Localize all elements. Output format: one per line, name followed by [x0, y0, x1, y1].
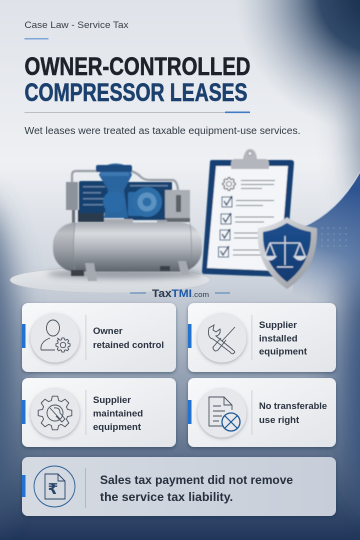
card: owner retained control [22, 303, 176, 372]
title: OWNER-CONTROLLED [24, 53, 250, 81]
card text: retained control [93, 340, 164, 351]
title rule [24, 112, 250, 113]
card text: installed [259, 334, 298, 344]
feet [71, 270, 84, 276]
blue machinery [79, 181, 113, 213]
platform [10, 267, 210, 293]
card text: equipment [93, 422, 142, 433]
eyebrow accent line [24, 38, 48, 40]
card text [259, 320, 308, 358]
card: no transferable use right [188, 378, 336, 447]
subtitle: Wet leases were treated as taxable equipment-use services. [24, 126, 300, 137]
card text: maintained [93, 408, 143, 420]
icon: rupee document: ₹ [48, 480, 58, 498]
card text [93, 395, 143, 433]
icon: rupee document [34, 466, 75, 507]
compressor head [99, 164, 132, 218]
icon: person with gear [30, 314, 80, 362]
card text: No transferable [259, 401, 327, 412]
card text: equipment [259, 346, 308, 358]
illustration: clipboard [202, 149, 294, 277]
electrical box [165, 190, 190, 219]
tank [53, 222, 202, 272]
checklist rows [233, 180, 275, 255]
card: supplier maintained equipment [22, 378, 176, 447]
dot pattern [322, 228, 346, 246]
card text: Owner [93, 326, 123, 337]
illustration: shield with scales [258, 217, 317, 289]
gear [223, 178, 235, 190]
paper [207, 166, 288, 271]
callout text: the service tax liability. [100, 492, 233, 504]
logo: TaxTMI.com [130, 288, 230, 300]
icon: document with cross [198, 388, 246, 438]
mounts [104, 219, 133, 231]
icon: gear with wrench [30, 388, 80, 438]
decorative arc [303, 172, 360, 227]
title [24, 53, 250, 107]
logo: TaxTMI.com: .com [192, 292, 209, 299]
icon: wrench and screwdriver [198, 314, 246, 362]
motor [128, 192, 146, 216]
card text [259, 401, 327, 426]
callout: sales tax [22, 457, 336, 516]
title: COMPRESSOR LEASES [24, 79, 248, 107]
card: supplier installed equipment [188, 303, 336, 372]
callout text [100, 475, 293, 504]
clip [231, 149, 269, 169]
illustration: air compressor [47, 164, 203, 281]
card text: Supplier [259, 320, 297, 331]
eyebrow: case law label: Case Law - Service Tax [24, 20, 129, 30]
callout text: Sales tax payment did not remove [100, 475, 293, 487]
card text [93, 326, 164, 351]
pipes [72, 171, 178, 190]
board [202, 160, 294, 277]
control box left [66, 182, 78, 210]
card text: Supplier [93, 395, 131, 406]
card text: use right [259, 415, 300, 426]
logo: TaxTMI.com: TaxTMI [152, 288, 192, 300]
